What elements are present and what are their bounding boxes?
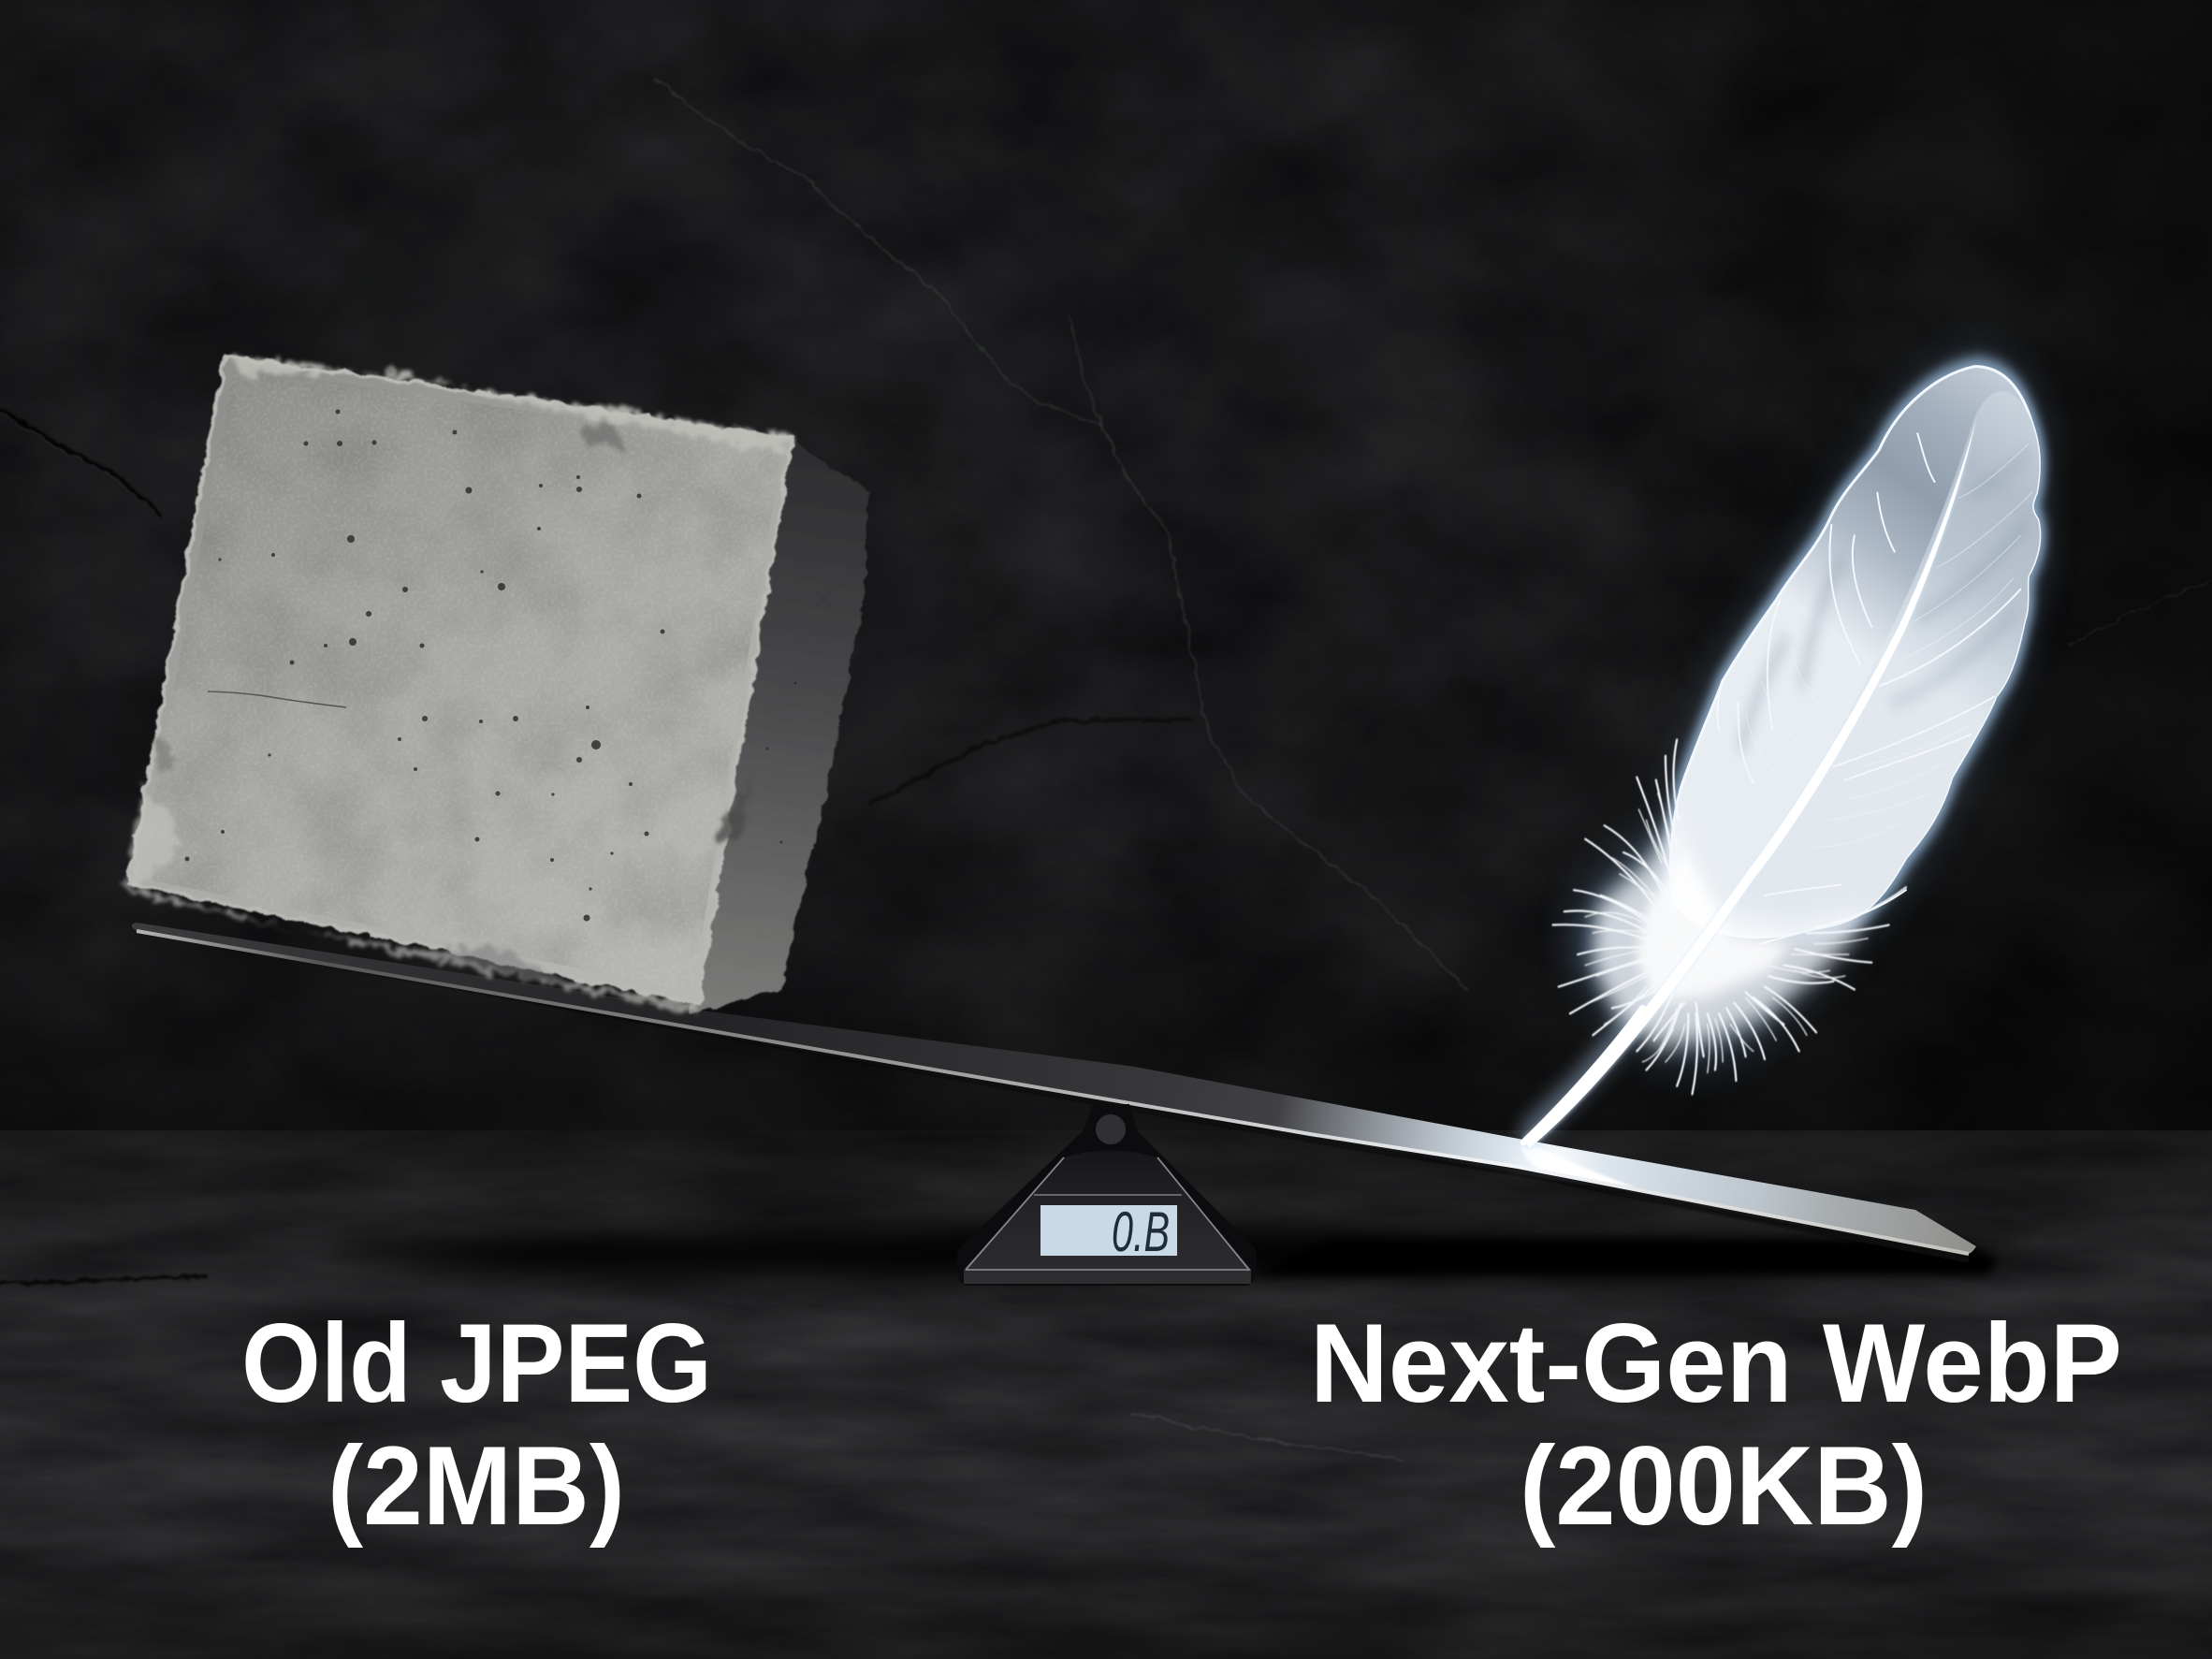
LCD display: 0.B — [1112, 1201, 1170, 1263]
fulcrum front plate — [964, 1151, 1251, 1284]
label: Old JPEG (2MB): Old JPEG — [241, 1301, 712, 1426]
fulcrum pivot — [1094, 1113, 1128, 1146]
glowing feather — [1522, 367, 2040, 1148]
feather shading folds — [1742, 455, 2029, 745]
block front face — [128, 356, 792, 1003]
block pores and hairline crack — [185, 410, 825, 921]
label: Next-Gen WebP (200KB): Next-Gen WebP — [1310, 1301, 2122, 1426]
concrete block — [122, 354, 869, 1014]
feather vane — [1670, 367, 2040, 944]
label: Old JPEG (2MB): (2MB) — [327, 1423, 625, 1549]
block chipped edges — [122, 354, 792, 1014]
feather downy base — [1553, 739, 1906, 1094]
label: Next-Gen WebP (200KB) — [1310, 1301, 2122, 1549]
block surface mottling — [138, 367, 782, 992]
seesaw plank — [132, 923, 1976, 1263]
LCD display — [1041, 1201, 1177, 1263]
label: Old JPEG (2MB) — [241, 1301, 712, 1549]
shadow beneath the scale — [327, 1230, 2012, 1278]
block side face — [674, 430, 869, 1014]
feather outer glow — [1522, 367, 2040, 1140]
background: dark stone wall — [0, 0, 2212, 1137]
label: Next-Gen WebP (200KB): (200KB) — [1520, 1423, 1928, 1549]
digital scale fulcrum — [956, 1104, 1257, 1286]
feather shaft — [1522, 417, 1976, 1148]
background: dark stone floor — [0, 1130, 2212, 1659]
fulcrum body — [956, 1104, 1257, 1286]
feather barbs — [1717, 433, 2032, 944]
